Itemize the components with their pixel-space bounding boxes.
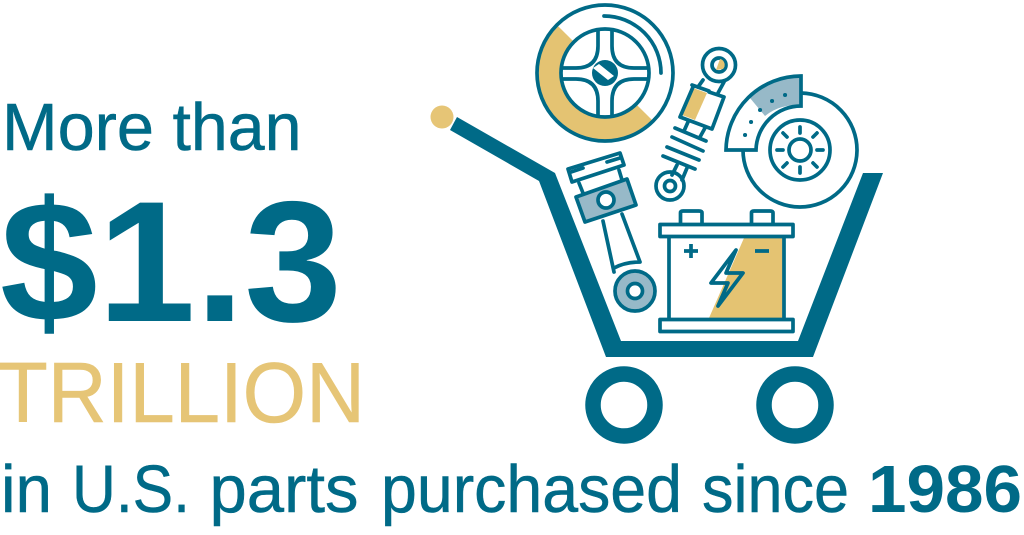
- caption: in U.S. parts purchased since 1986: U.S.: [72, 452, 190, 527]
- icon: shock absorber: [656, 48, 736, 200]
- right wheel: [764, 374, 826, 436]
- caliper bolts: [745, 95, 785, 135]
- heading: More than: than: [172, 90, 302, 165]
- caliper: [726, 76, 801, 150]
- caption: in U.S. parts purchased since 1986: in: [1, 452, 52, 527]
- caption: in U.S. parts purchased since 1986: [1, 452, 1022, 527]
- icon: brake disc and caliper: [726, 76, 857, 207]
- heading: TRILLION: TRILLION: [0, 346, 365, 441]
- caption: in U.S. parts purchased since 1986: purchased: [381, 452, 682, 527]
- caption: in U.S. parts purchased since 1986: 1986: [868, 452, 1022, 527]
- left wheel: [593, 374, 655, 436]
- icon: battery: [660, 211, 793, 332]
- big number: $1.3: $1.3: [0, 166, 342, 358]
- cart body: [450, 117, 883, 357]
- icon: tire and rim: [537, 5, 673, 141]
- heading: More than: [2, 90, 302, 165]
- battery gold fill: [709, 238, 784, 318]
- cart handle knob: [430, 106, 454, 128]
- icon: piston: [568, 153, 655, 311]
- shock body: [682, 88, 707, 120]
- heading: More than: More: [2, 90, 154, 165]
- caption: in U.S. parts purchased since 1986: since: [702, 452, 849, 527]
- tire gold fill: [538, 26, 652, 140]
- brake disc: [743, 93, 857, 207]
- caption: in U.S. parts purchased since 1986: parts: [210, 452, 358, 527]
- shopping cart: [430, 106, 883, 436]
